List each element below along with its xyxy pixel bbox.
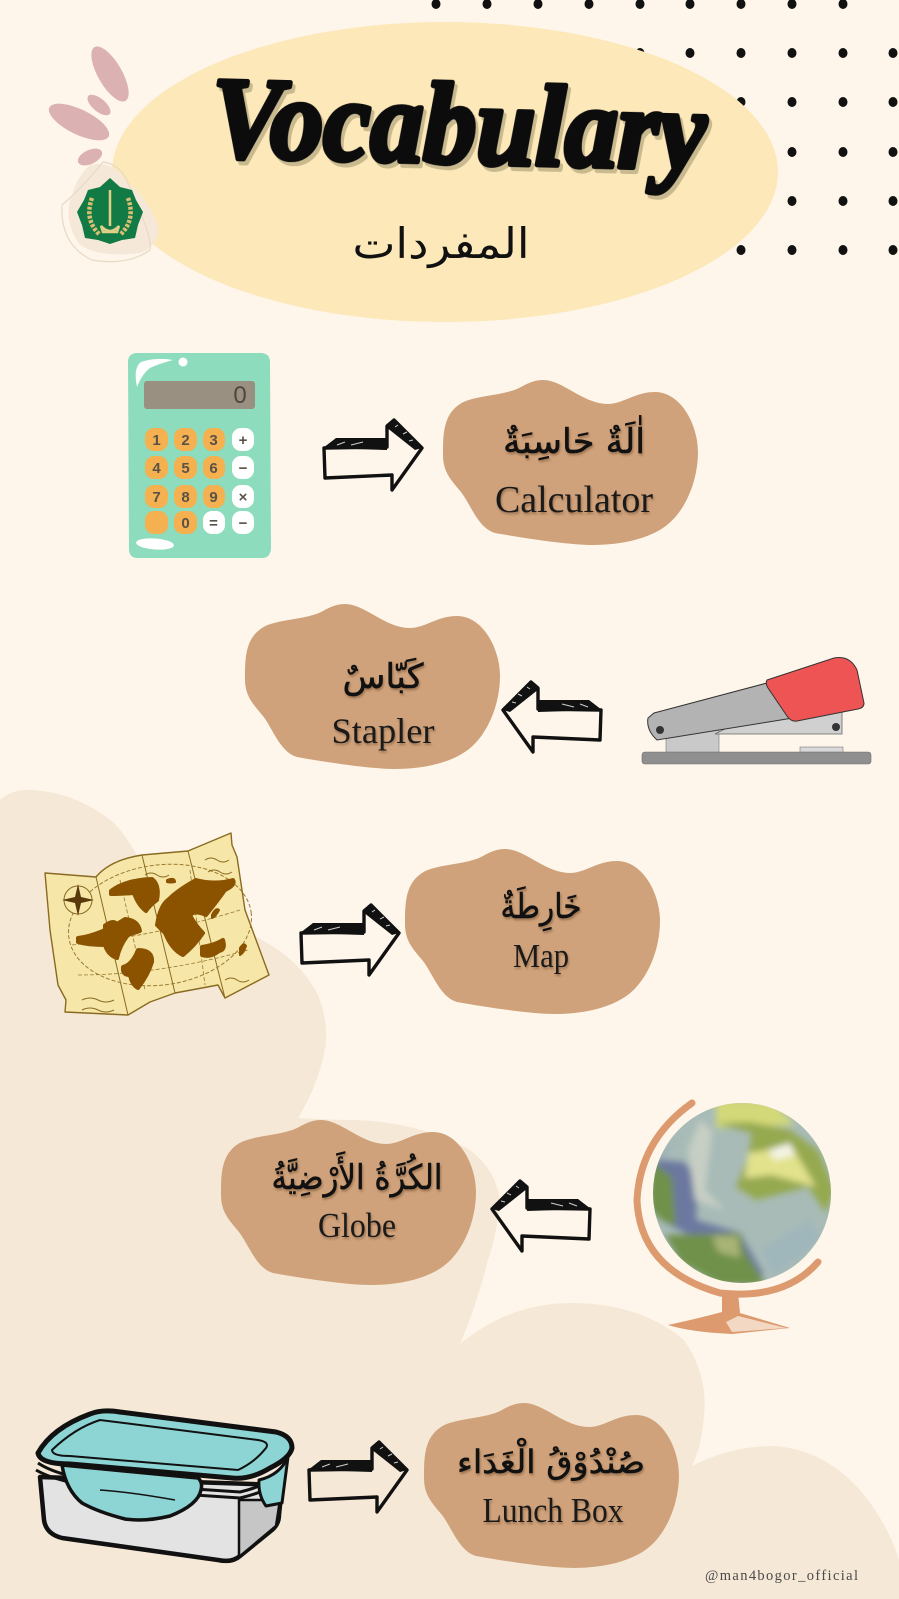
background wave shape (0, 790, 899, 1599)
panel: lunch box word: Lunch Box (482, 1491, 624, 1530)
panel: calculator word (443, 380, 698, 545)
dot pattern (432, 0, 898, 255)
icon: map (45, 833, 269, 1015)
panel: globe word: Globe (318, 1206, 396, 1245)
panel: map word: Map (513, 938, 569, 975)
arrow: calculator to word (323, 420, 422, 490)
panel: globe word (221, 1120, 476, 1285)
panel: stapler word: Stapler (332, 711, 434, 751)
icon: calculator: − (239, 515, 248, 532)
icon: calculator: × (239, 489, 248, 506)
icon: calculator: 5 (181, 460, 190, 477)
icon: globe (637, 1100, 835, 1334)
icon: calculator: 0 (233, 382, 247, 409)
arrow: stapler to word (503, 682, 602, 752)
panel: map word (405, 849, 660, 1014)
panel: calculator word: Calculator (495, 479, 653, 521)
icon: calculator: − (239, 460, 248, 477)
school emblem (62, 162, 158, 262)
panel: lunch box word (424, 1403, 679, 1568)
icon: lunch box (36, 1411, 292, 1561)
header oval (112, 22, 778, 322)
pink accent petals (44, 41, 136, 169)
icon: calculator (128, 353, 271, 558)
watermark handle: @man4bogor_official (705, 1568, 858, 1584)
panel: stapler word (245, 604, 500, 769)
icon: calculator: 8 (181, 489, 190, 506)
panel: lunch box word: صُنْدُوْقُ الْغَدَاء (457, 1437, 645, 1481)
icon: stapler (642, 658, 871, 764)
icon: calculator: 6 (209, 460, 218, 477)
arrow: globe to word (492, 1181, 591, 1251)
arrow: map to word (300, 905, 399, 975)
icon: calculator: 9 (209, 489, 218, 506)
title: Vocabulary (210, 55, 709, 195)
panel: globe word: الكُرَّةُ الأَرْضِيَّةُ (272, 1150, 442, 1198)
arrow: lunch box to word (308, 1442, 407, 1512)
icon: calculator: 4 (152, 460, 161, 477)
panel: stapler word: كَبّاسٌ (342, 657, 424, 697)
icon: calculator: 2 (181, 432, 190, 449)
icon: calculator: 3 (209, 432, 218, 449)
icon: calculator: 1 (152, 432, 161, 449)
subtitle: المفردات (352, 219, 530, 268)
icon: calculator: + (239, 432, 248, 449)
icon: calculator: 7 (152, 489, 161, 506)
panel: calculator word: اٰلَةٌ حَاسِبَةٌ (503, 416, 645, 462)
icon: calculator: = (209, 515, 218, 532)
icon: calculator: 0 (181, 515, 190, 532)
panel: map word: خَارِطَةٌ (500, 886, 582, 931)
